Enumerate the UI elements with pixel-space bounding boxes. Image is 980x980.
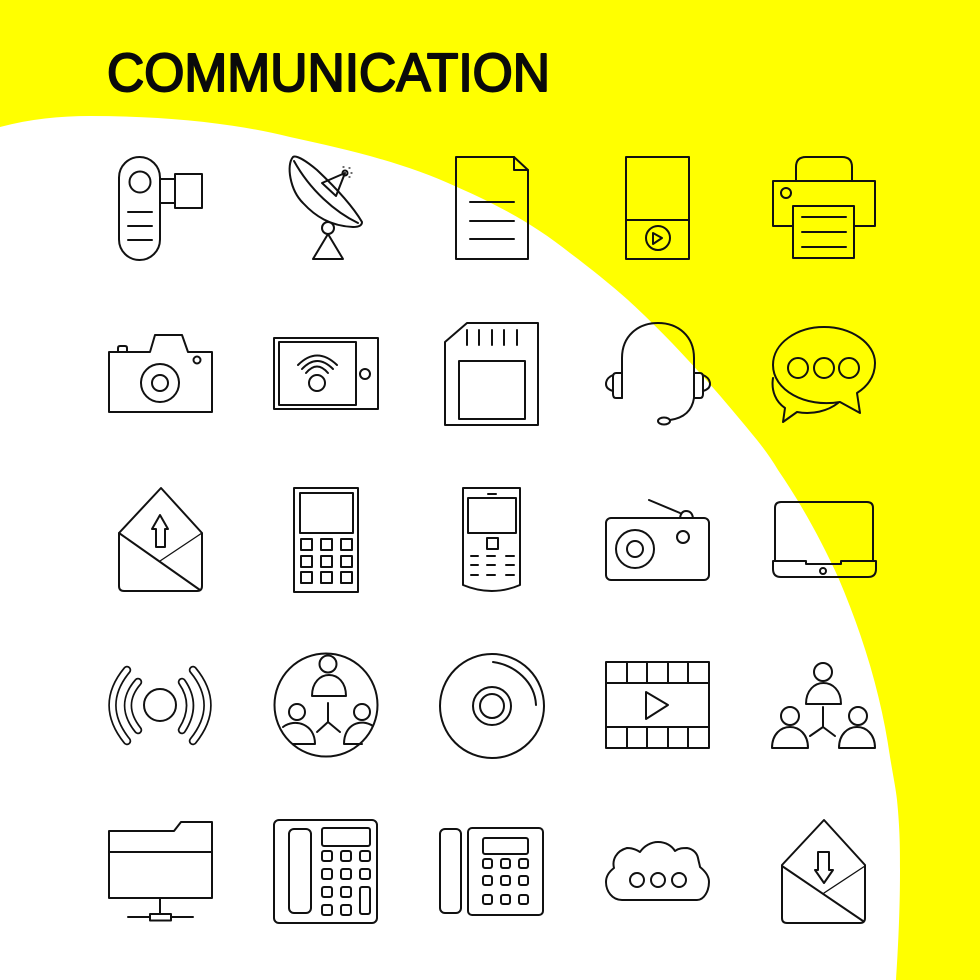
icon: broadcast signal [112,670,208,741]
icon: video film strip [606,662,709,748]
icon: document [456,157,528,259]
icon: compact disc [440,654,544,758]
icon: people network circle [274,654,378,756]
icon: open envelope up [119,488,202,591]
title: COMMUNICATION [107,43,550,103]
icon: memory card [445,323,538,425]
icon: headset [606,323,710,424]
icon: printer [773,157,875,258]
icon: people network [772,663,875,748]
icon: wifi tablet [274,338,378,409]
icon: radio [606,500,709,580]
icon: chat bubbles [773,327,875,422]
icon: keypad phone [294,488,358,592]
icon: mobile phone [463,488,520,591]
icon: desk phone large [274,820,377,923]
icon: cloud [606,842,709,900]
icon: media player [626,157,689,259]
icon: photo camera [109,335,212,412]
icon: satellite dish [290,157,362,259]
icon: laptop [773,502,876,577]
icon: desk phone small [440,828,543,915]
icon grid [109,157,876,923]
icon: open envelope down [782,820,865,923]
icon: network folder [109,822,212,920]
icon: video camera [119,157,202,260]
